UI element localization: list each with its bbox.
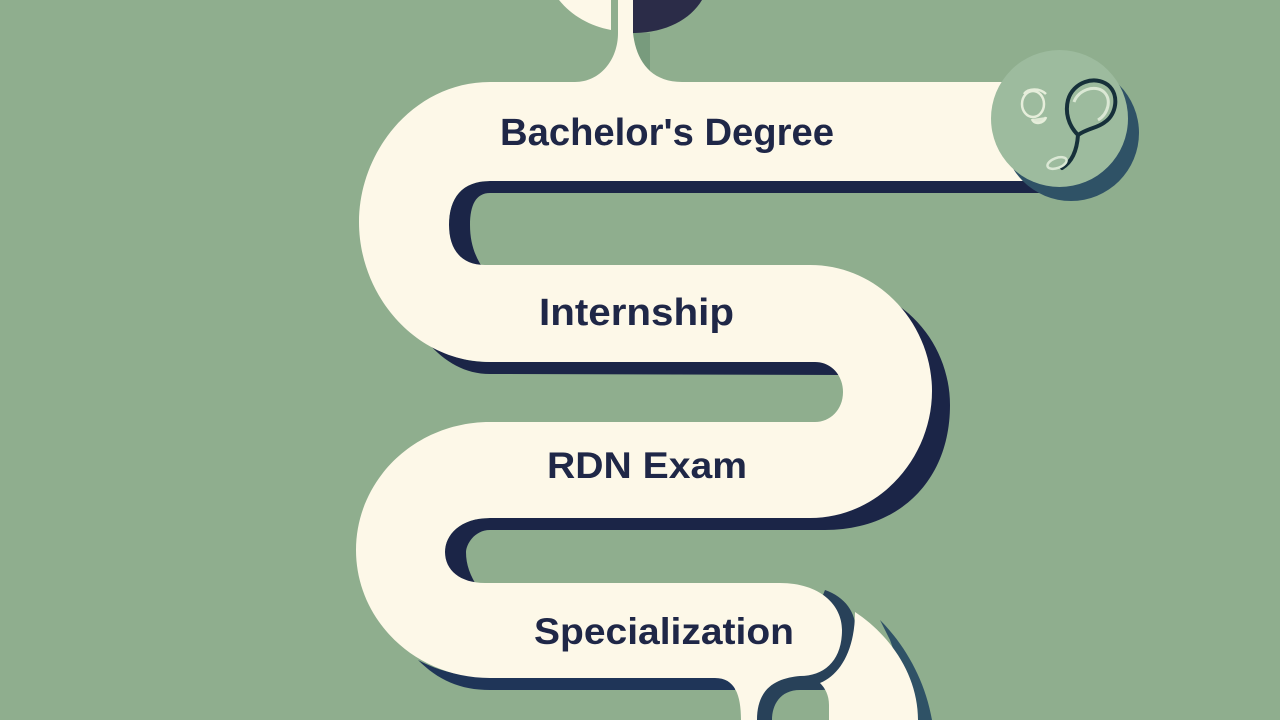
label: Internship: Internship: [539, 292, 734, 334]
winding path shadow: [418, 181, 1060, 720]
label: Specialization: Specialization: [534, 611, 794, 652]
label: Bachelor's Degree: Bachelor's Degree: [500, 112, 834, 154]
winding cream path: [356, 0, 1040, 720]
lower path branch: [820, 612, 918, 720]
icon: loop stethoscope: [1046, 80, 1115, 171]
icon: small ring: [1022, 90, 1046, 123]
icon badge: [991, 50, 1139, 201]
label: RDN Exam: RDN Exam: [547, 445, 747, 486]
top semicircle emblem: [559, 0, 702, 71]
